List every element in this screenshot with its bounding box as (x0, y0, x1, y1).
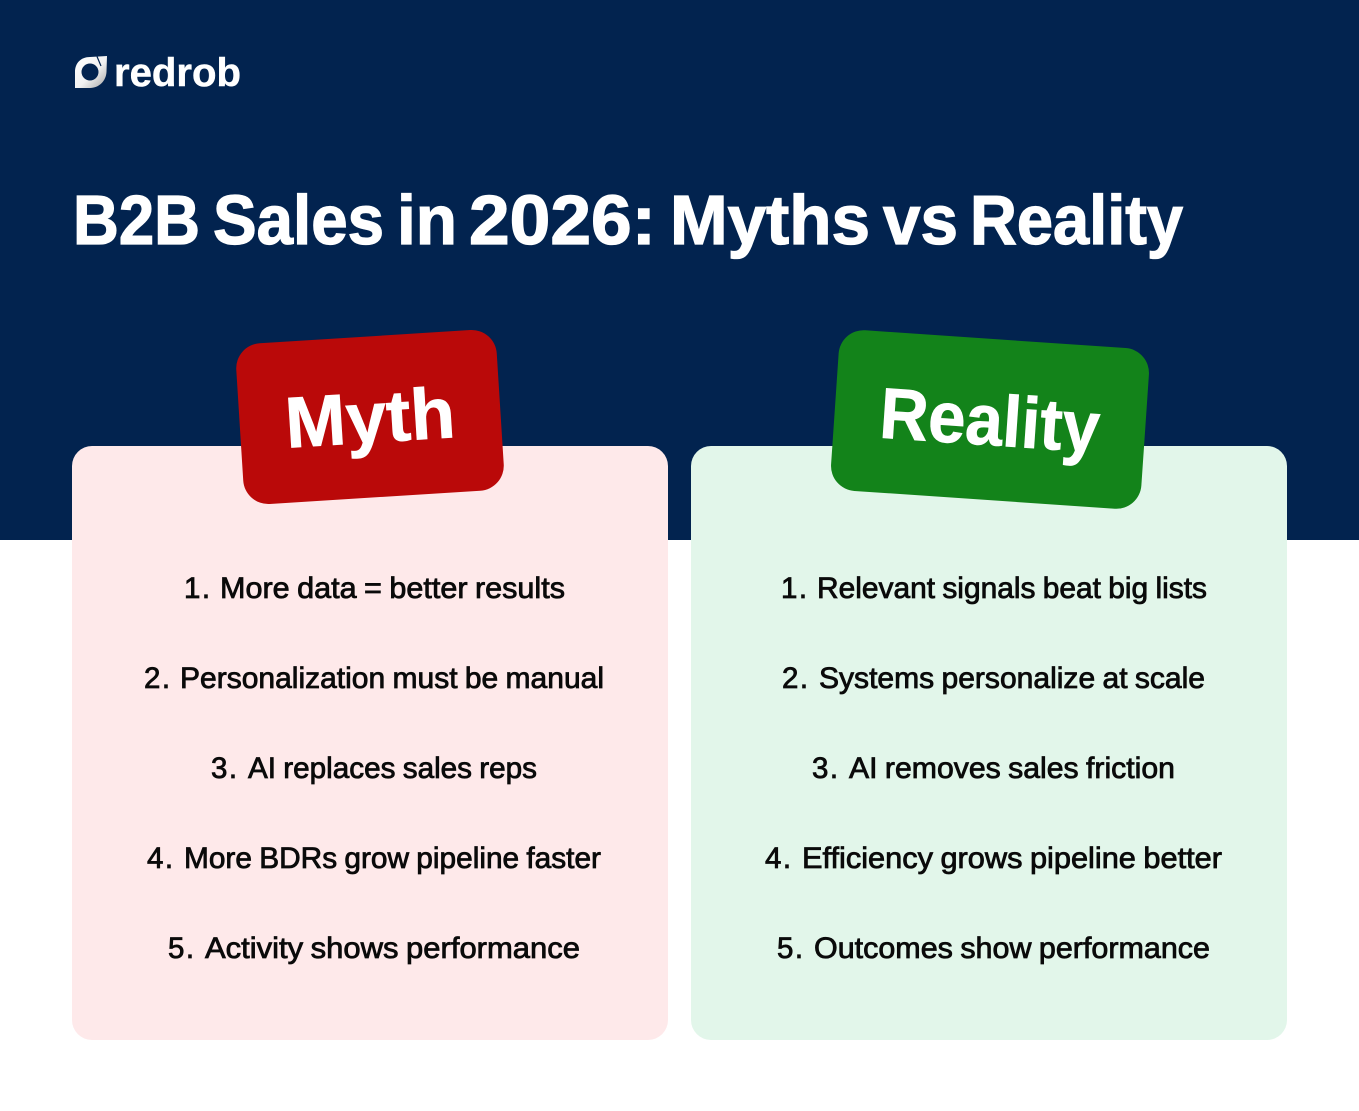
myth card background (72, 446, 668, 1040)
title: vs (883, 181, 958, 259)
badge: myth: Myth (283, 373, 457, 464)
myth list: 5. (168, 932, 196, 965)
myth list: Activity shows performance (205, 932, 580, 965)
title: B2B (73, 181, 200, 259)
header background (0, 0, 1359, 540)
icon: logo ring (75, 56, 107, 88)
myth list: More data = better results (220, 572, 565, 605)
title: 2026: (469, 181, 656, 259)
reality list: 5. (777, 932, 805, 965)
panel: reality (691, 446, 1287, 1040)
myth list: 4. (147, 842, 175, 875)
title: Myths (670, 181, 870, 259)
title (73, 181, 1183, 259)
myth list: 1. (184, 572, 212, 605)
myth list: Personalization must be manual (180, 662, 604, 695)
myth list: More BDRs grow pipeline faster (184, 842, 601, 875)
reality list: 2. (782, 662, 810, 695)
reality list: Efficiency grows pipeline better (802, 842, 1222, 875)
badge: myth (235, 328, 505, 506)
reality list: 3. (812, 752, 840, 785)
reality list: AI removes sales friction (849, 752, 1175, 785)
title: Sales (213, 181, 384, 259)
reality list: Relevant signals beat big lists (817, 572, 1207, 605)
reality list: 1. (781, 572, 809, 605)
myth list: AI replaces sales reps (248, 752, 537, 785)
panel: myth (72, 446, 668, 1040)
badge: reality: Reality (877, 374, 1102, 468)
reality list: 4. (765, 842, 793, 875)
myth list (144, 572, 604, 965)
title: Reality (970, 181, 1183, 259)
myth list: 3. (211, 752, 239, 785)
myth list: 2. (144, 662, 172, 695)
reality list: Outcomes show performance (814, 932, 1210, 965)
badge: reality (829, 329, 1151, 510)
reality list: Systems personalize at scale (819, 662, 1205, 695)
logo: redrob (75, 51, 241, 95)
reality card background (691, 446, 1287, 1040)
reality list (765, 572, 1222, 965)
logo wordmark: redrob (114, 51, 241, 95)
title: in (397, 181, 457, 259)
